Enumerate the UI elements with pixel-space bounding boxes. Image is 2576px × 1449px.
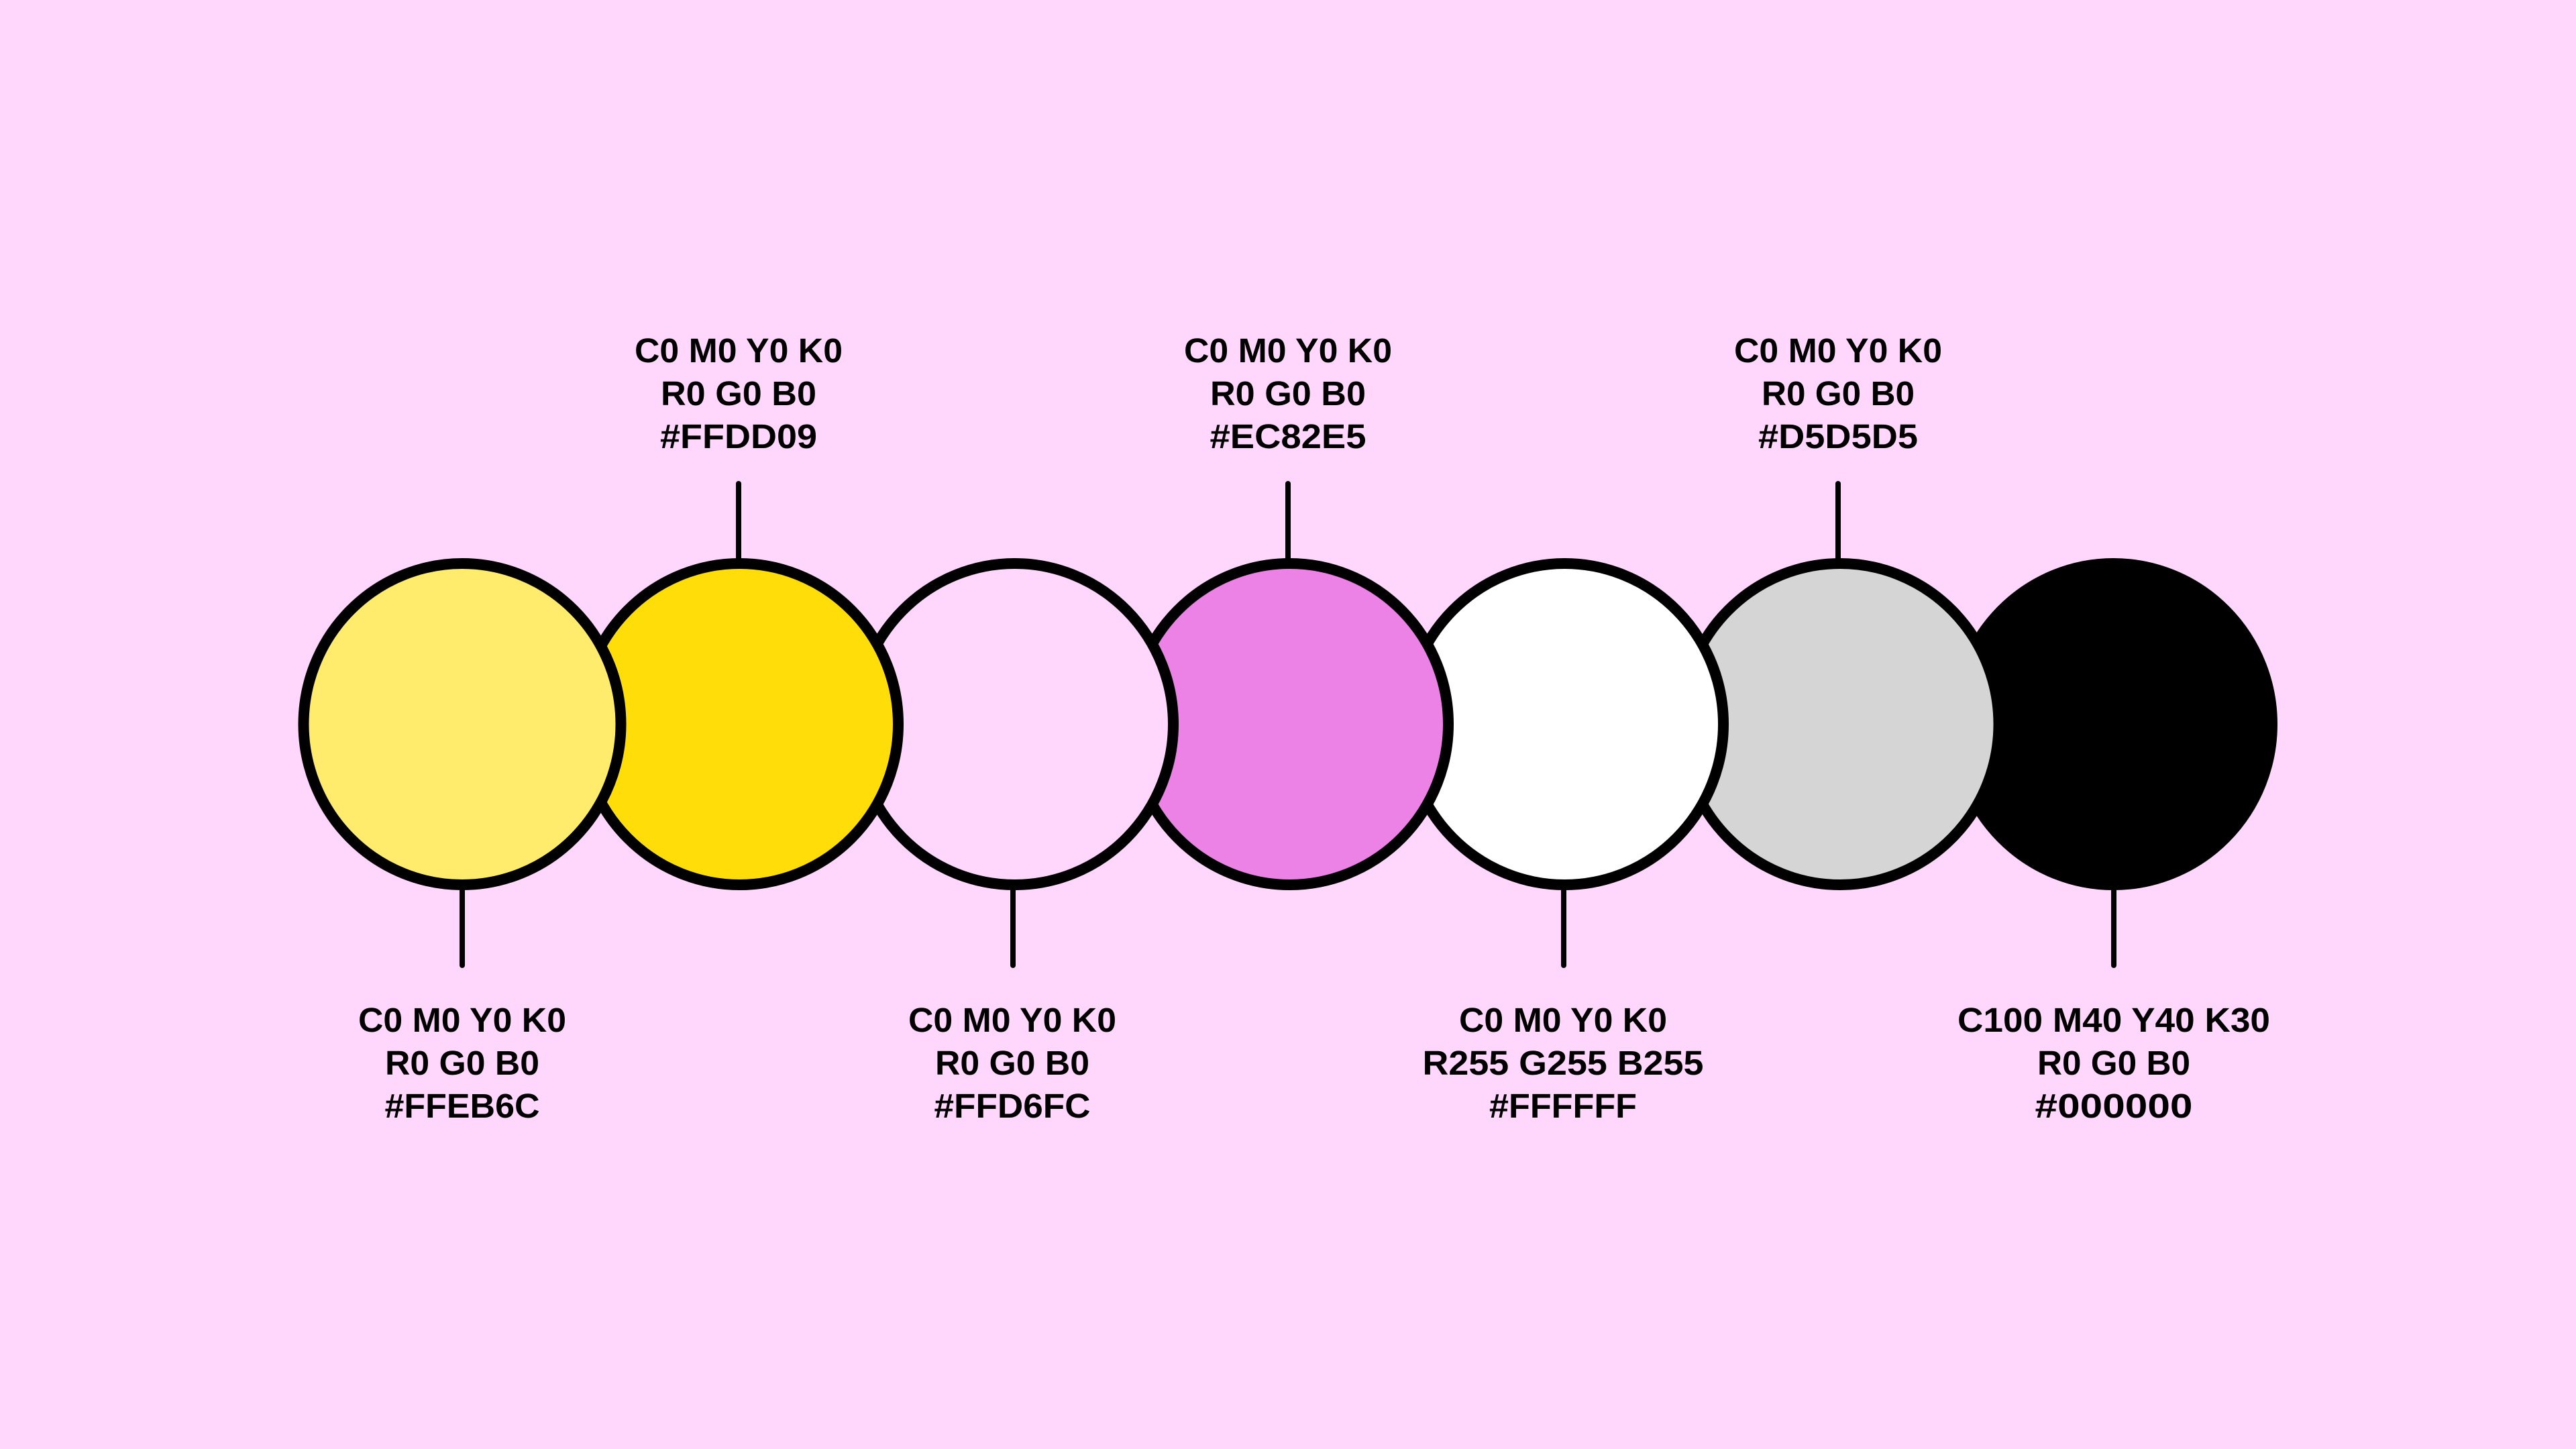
leader line: pale pink swatch [1010, 885, 1016, 965]
label: pale yellow values: #FFEB6C [385, 1087, 539, 1125]
label: grey values: C0 M0 Y0 K0 [1734, 331, 1942, 370]
label: pale yellow values: C0 M0 Y0 K0 [358, 1001, 566, 1039]
label: grey values: #D5D5D5 [1758, 417, 1918, 455]
swatch: yellow [581, 564, 898, 885]
label: pale pink values: R0 G0 B0 [935, 1044, 1089, 1082]
swatch: pink [1131, 564, 1448, 885]
leader line: pink swatch [1285, 484, 1291, 564]
swatch: white [1406, 564, 1723, 885]
label: black values: #000000 [2035, 1087, 2192, 1125]
label: white values [1422, 1001, 1704, 1125]
label: pale pink values: C0 M0 Y0 K0 [908, 1001, 1116, 1039]
swatch: pale pink [856, 564, 1173, 885]
label: grey values [1734, 331, 1942, 455]
swatch: grey [1681, 564, 1999, 885]
label: white values: R255 G255 B255 [1422, 1044, 1704, 1082]
label: black values: C100 M40 Y40 K30 [1957, 1001, 2270, 1039]
swatch: pale yellow [303, 564, 621, 885]
label: pink values: C0 M0 Y0 K0 [1184, 331, 1392, 370]
label: black values: R0 G0 B0 [2037, 1044, 2190, 1082]
label: pale pink values: #FFD6FC [934, 1087, 1091, 1125]
label: grey values: R0 G0 B0 [1762, 374, 1915, 413]
leader line: pale yellow swatch [460, 885, 465, 965]
leader line: yellow swatch [736, 484, 741, 564]
leader line: grey swatch [1835, 484, 1841, 564]
label: pink values: #EC82E5 [1210, 417, 1366, 455]
label: yellow values [635, 331, 843, 455]
label: yellow values: C0 M0 Y0 K0 [635, 331, 843, 370]
label: black values [1957, 1001, 2270, 1125]
label: pale yellow values [358, 1001, 566, 1125]
label: yellow values: R0 G0 B0 [661, 374, 816, 413]
label: pink values: R0 G0 B0 [1210, 374, 1366, 413]
label: white values: C0 M0 Y0 K0 [1459, 1001, 1667, 1039]
label: pale pink values [908, 1001, 1116, 1125]
leader line: black swatch [2111, 885, 2116, 965]
label: pale yellow values: R0 G0 B0 [385, 1044, 539, 1082]
leader line: white swatch [1561, 885, 1566, 965]
label: pink values [1184, 331, 1392, 455]
label: yellow values: #FFDD09 [660, 417, 817, 455]
label: white values: #FFFFFF [1489, 1087, 1637, 1125]
swatch: black [1955, 564, 2272, 885]
